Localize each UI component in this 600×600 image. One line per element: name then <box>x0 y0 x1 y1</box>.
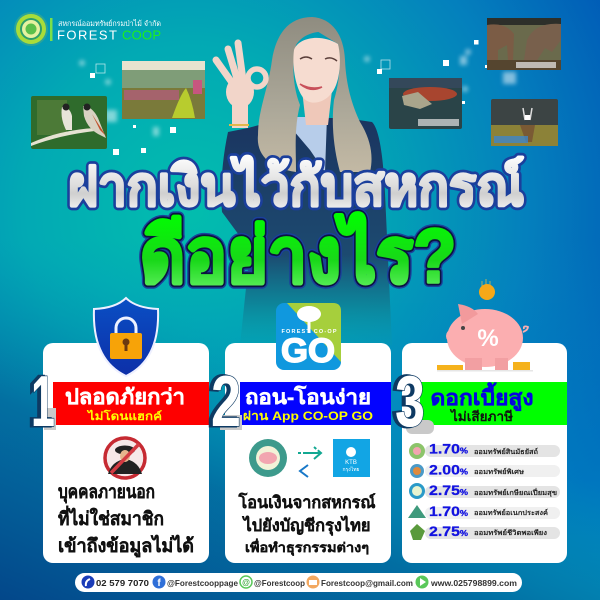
shirt collar <box>282 117 327 172</box>
panel 2 text: โอนเงินจากสหกรณ์ <box>238 492 376 512</box>
card: bird <box>31 96 107 149</box>
email <box>306 576 413 588</box>
panel 2 text <box>238 492 376 556</box>
blue banner <box>240 382 391 425</box>
icon: no outsiders <box>105 438 145 478</box>
banner heading: ดอกเบี้ยสูง <box>430 382 534 412</box>
rate row 4 <box>408 503 560 519</box>
rate row 1: ออมทรัพย์สินมัธยัสถ์ <box>474 447 538 456</box>
number 1 <box>28 362 56 442</box>
icon: KTB logo: กรุงไทย <box>343 466 360 473</box>
face <box>293 38 340 103</box>
rate row 5: ออมทรัพย์ชีวิตพอเพียง <box>474 528 548 537</box>
number 3: 3 <box>395 362 425 442</box>
icon: Forest Co-op GO app: GO <box>281 332 335 370</box>
banner subheading: ผ่าน App CO-OP GO <box>243 409 373 423</box>
number 2: 2 <box>211 362 241 442</box>
website <box>416 576 517 588</box>
rate row 4: 1.70 % <box>429 503 468 519</box>
rate row 3 <box>409 482 560 499</box>
panel 1: safer <box>28 298 209 563</box>
panel 1 text: ที่ไม่ใช่สมาชิก <box>58 505 164 529</box>
card: elephants <box>487 18 561 70</box>
banner subheading: ไม่เสียภาษี <box>449 408 513 424</box>
hand OK gesture <box>216 43 266 128</box>
icon: piggy bank with coin: % <box>477 325 499 352</box>
number 1: 1 <box>28 362 52 442</box>
hair left <box>258 17 330 172</box>
rate row 1: 1.70 % <box>429 440 468 456</box>
neck <box>302 90 332 125</box>
card: flower field <box>122 61 205 119</box>
panel 2 text: ไปยังบัญชีกรุงไทย <box>242 515 370 536</box>
panel 1 text: เข้าถึงข้อมูลไม่ได้ <box>58 534 194 558</box>
panel 2: easy transfer <box>208 303 391 563</box>
rate row 5 <box>410 523 560 540</box>
facebook <box>152 576 238 589</box>
icon: Forest Co-op GO app: FOREST CO-OP <box>282 329 337 335</box>
logo: Forest Coop: COOP <box>122 28 161 42</box>
icon: shield with padlock <box>94 298 158 376</box>
contact bar <box>75 573 522 592</box>
particles <box>79 40 530 155</box>
jacket <box>221 118 392 345</box>
hair right <box>312 17 372 172</box>
red banner <box>53 382 209 425</box>
facebook: @Forestcooppage <box>167 578 238 588</box>
rate row 4: ออมทรัพย์อเนกประสงค์ <box>474 508 548 517</box>
rate row 3: 2.75 % <box>429 482 468 498</box>
logo: Forest Coop: FOREST <box>57 28 117 42</box>
banner heading: ถอน-โอนง่าย <box>245 385 371 409</box>
card: deer <box>491 99 558 146</box>
number 1: 1 <box>31 362 55 442</box>
phone: 02 579 7070 <box>96 578 149 588</box>
icon: Forest Co-op GO app <box>276 303 341 370</box>
website: www.025798899.com <box>430 578 517 588</box>
number 3: 3 <box>392 362 422 442</box>
title line 1: ฝากเงินไว้กับสหกรณ์ <box>68 155 524 217</box>
green banner <box>420 382 567 425</box>
icon: transfer arrows <box>298 447 321 477</box>
logo: Forest Coop: สหกรณ์ออมทรัพย์กรมป่าไม้ จำกัด <box>58 19 161 28</box>
facebook: f <box>157 578 161 589</box>
panel 2 text: เพื่อทำธุรกรรมต่างๆ <box>245 538 369 556</box>
line: @Forestcoop <box>254 578 305 588</box>
title line 2: ดีอย่างไร? <box>140 212 456 299</box>
panel 3: high interest <box>392 279 567 563</box>
logo: Forest Coop <box>14 12 161 46</box>
rate row 2: 2.00 % <box>429 462 468 478</box>
title line 2: ดีอย่างไร? <box>140 212 456 299</box>
panel 1 text: บุคคลภายนอก <box>58 481 155 504</box>
icon: piggy bank with coin <box>437 279 533 372</box>
icon: savings logo <box>249 439 287 477</box>
icon: KTB logo <box>333 439 370 477</box>
rate row 5: 2.75 % <box>429 523 468 539</box>
line <box>240 576 305 588</box>
card: turtle <box>389 78 462 129</box>
icon: KTB logo: KTB <box>345 460 357 466</box>
rate row 2 <box>410 462 560 478</box>
rate row 1 <box>409 440 560 459</box>
title line 2: ดีอย่างไร? <box>140 212 456 299</box>
title line 1: ฝากเงินไว้กับสหกรณ์ <box>68 155 524 217</box>
eyes and smile <box>300 57 337 61</box>
number 2: 2 <box>208 362 238 442</box>
rate row 3: ออมทรัพย์เกษียณเปี่ยมสุข <box>474 487 557 497</box>
rate row 2: ออมทรัพย์พิเศษ <box>474 467 524 476</box>
line: @ <box>242 578 250 587</box>
phone <box>82 576 149 588</box>
banner subheading: ไม่โดนแฮกค์ <box>86 409 162 423</box>
email: Forestcoop@gmail.com <box>321 578 413 588</box>
woman presenter <box>216 17 392 345</box>
banner heading: ปลอดภัยกว่า <box>65 386 185 409</box>
title <box>68 155 524 299</box>
panel 1 text <box>58 481 194 558</box>
